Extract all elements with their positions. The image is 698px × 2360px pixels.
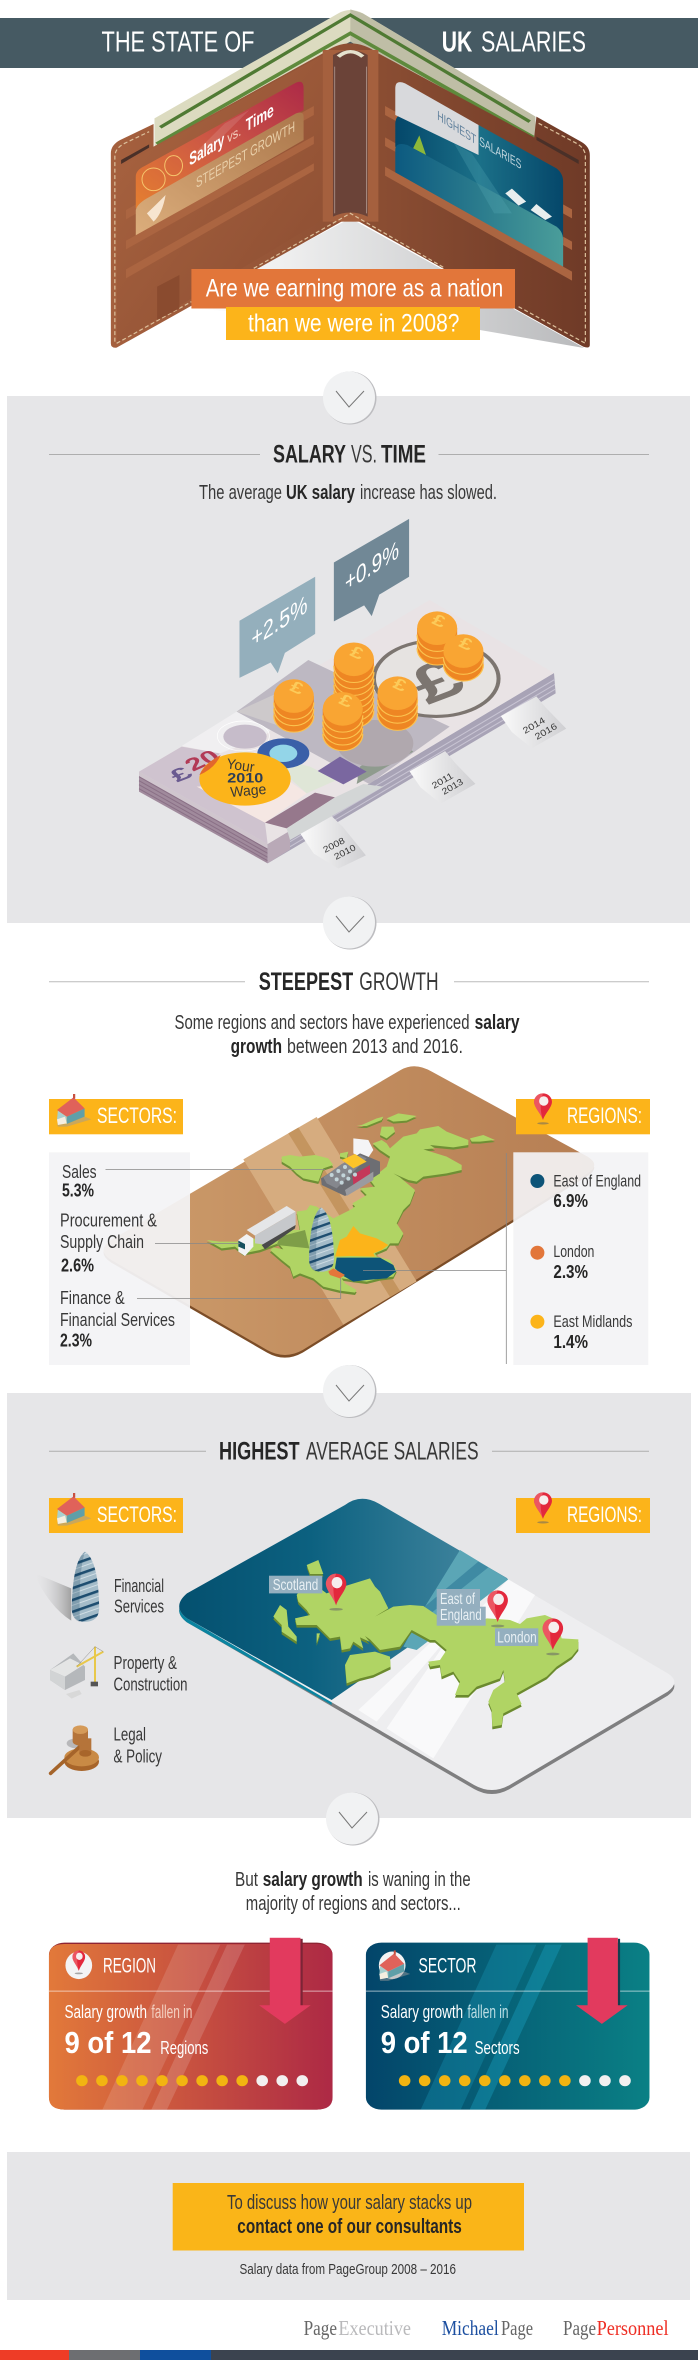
label: east of england: East of bbox=[440, 1591, 475, 1608]
sector: legal and policy: Legal bbox=[114, 1725, 146, 1745]
wallet illustration bbox=[111, 9, 590, 348]
coin pound marks: £ bbox=[429, 610, 448, 632]
icon: gherkin bbox=[309, 1207, 334, 1272]
sector: property and construction bbox=[50, 1647, 187, 1699]
title left: THE STATE OF bbox=[102, 26, 254, 58]
panel: call to action bbox=[7, 2152, 690, 2300]
intro text: salary growth waning bbox=[235, 1869, 471, 1915]
card: sector: SECTOR bbox=[418, 1954, 476, 1978]
sector list text: Sales bbox=[62, 1162, 97, 1182]
region list text: 1.4% bbox=[553, 1332, 588, 1352]
footer colour bar bbox=[0, 2350, 698, 2360]
sector list text: Supply Chain bbox=[60, 1232, 144, 1252]
brown board with UK map bbox=[49, 1066, 648, 1365]
speech bubble: +2.5%: +2.5% bbox=[252, 589, 308, 653]
region icon bbox=[65, 1951, 92, 1979]
intro text: growth bbox=[231, 1036, 282, 1058]
note value bbox=[163, 746, 226, 785]
sector list text: 2.6% bbox=[61, 1256, 94, 1276]
tab: 2011-2013: 2013 bbox=[440, 777, 465, 797]
sector list text: Financial Services bbox=[60, 1310, 175, 1330]
pin: scotland bbox=[326, 1574, 346, 1611]
logo: michael page: Michael bbox=[442, 2316, 499, 2340]
sector list text bbox=[60, 1162, 175, 1351]
cta box: To discuss how your salary stacks up bbox=[227, 2192, 472, 2214]
logo: page personnel: Personnel bbox=[597, 2316, 669, 2340]
region list text: East Midlands bbox=[553, 1312, 632, 1331]
card: region: fallen in bbox=[151, 2002, 192, 2022]
pin: london bbox=[543, 1618, 563, 1655]
coin pound marks: £ bbox=[456, 633, 475, 655]
section heading: STEEPEST bbox=[259, 968, 353, 996]
sticker: your 2010 wage bbox=[199, 752, 291, 806]
chevron button 4 bbox=[326, 1792, 380, 1846]
intro text: salary growth waning: salary growth bbox=[263, 1869, 363, 1891]
logo: michael page: Page bbox=[501, 2316, 533, 2340]
question banner: Are we earning more as a nation bbox=[206, 274, 503, 302]
speech bubble: +2.5% bbox=[239, 577, 315, 678]
intro text bbox=[199, 482, 497, 504]
coin pound marks: £ bbox=[336, 690, 355, 712]
sector: legal and policy: & Policy bbox=[114, 1747, 162, 1767]
banknote stack with coins bbox=[139, 519, 566, 869]
label: scotland: Scotland bbox=[273, 1577, 318, 1594]
logo: page personnel: Page bbox=[563, 2316, 596, 2340]
icon: house bbox=[57, 1094, 91, 1127]
tab: 2008-2010: 2008 bbox=[321, 835, 346, 855]
section heading: HIGHEST bbox=[219, 1437, 300, 1465]
progress dots bbox=[399, 2075, 631, 2086]
card: region bbox=[49, 1938, 333, 2110]
title right bbox=[442, 26, 586, 58]
sector: legal and policy bbox=[51, 1725, 162, 1773]
intro text: UK salary bbox=[286, 482, 356, 504]
icon: house bbox=[57, 1493, 91, 1526]
regions tag bbox=[516, 1492, 650, 1533]
card: sector: Salary growth bbox=[381, 2002, 463, 2022]
intro text: salary growth waning: is waning in the bbox=[368, 1869, 471, 1891]
sticker: your 2010 wage: Your bbox=[225, 756, 256, 776]
sector list text: Procurement & bbox=[60, 1211, 157, 1231]
sector: financial services bbox=[33, 1552, 164, 1622]
arrow down bbox=[576, 1938, 628, 2024]
sectors tag bbox=[49, 1094, 183, 1134]
region list text: East of England bbox=[553, 1172, 641, 1191]
sectors tag: SECTORS: bbox=[97, 1502, 177, 1527]
section: steepest growth bbox=[49, 968, 650, 1365]
title right: UK bbox=[442, 26, 472, 58]
intro text: Some regions and sectors have experienced bbox=[174, 1012, 470, 1034]
section heading: GROWTH bbox=[359, 968, 439, 996]
card: region: Regions bbox=[160, 2038, 208, 2058]
wallet card labels: HIGHEST bbox=[437, 108, 476, 148]
note value: 20 bbox=[179, 746, 226, 775]
panel: sectors list bbox=[49, 1152, 190, 1365]
cta box: contact one of our consultants bbox=[237, 2216, 462, 2238]
pin: east of england bbox=[487, 1590, 508, 1627]
section heading: TIME bbox=[381, 440, 426, 468]
progress dots bbox=[76, 2075, 308, 2086]
card: region: Salary growth bbox=[64, 2002, 147, 2022]
map: east midlands bbox=[335, 1226, 388, 1257]
intro text: salary growth waning: But bbox=[235, 1869, 258, 1891]
question banner: than we were in 2008? bbox=[248, 310, 460, 338]
regions tag: REGIONS: bbox=[567, 1502, 642, 1527]
speech bubble: +0.9%: +0.9% bbox=[345, 534, 399, 597]
sector: financial services: Services bbox=[114, 1597, 164, 1617]
sector: property and construction: Construction bbox=[114, 1675, 188, 1695]
sector list text: 5.3% bbox=[62, 1181, 94, 1201]
header band bbox=[0, 18, 698, 68]
cta box bbox=[173, 2183, 524, 2250]
label: east of england bbox=[437, 1589, 486, 1626]
chevron button 2 bbox=[323, 896, 376, 950]
card: sector bbox=[366, 1938, 649, 2110]
map: east of england bbox=[335, 1258, 396, 1282]
chevron button 1 bbox=[323, 372, 376, 424]
panel: regions list bbox=[513, 1152, 648, 1365]
tab: 2011-2013: 2011 bbox=[430, 771, 455, 791]
card: highest salaries bbox=[395, 82, 563, 243]
chevron button 3 bbox=[323, 1365, 376, 1418]
arrow down bbox=[259, 1938, 311, 2024]
region list text: 6.9% bbox=[553, 1191, 588, 1211]
tab: 2008-2010 bbox=[300, 816, 366, 869]
coin pound marks: £ bbox=[347, 642, 366, 664]
logo: page executive: Executive bbox=[338, 2316, 411, 2340]
intro text: salary bbox=[475, 1012, 520, 1034]
coin pound marks bbox=[287, 610, 475, 712]
leader lines bbox=[106, 1153, 506, 1364]
sectors tag bbox=[49, 1493, 183, 1533]
card: region: 9 of 12 bbox=[64, 2025, 152, 2060]
note value: £ bbox=[163, 763, 199, 785]
wallet card labels: Salary bbox=[189, 129, 224, 171]
tab: 2008-2010: 2010 bbox=[332, 842, 357, 862]
panel: highest average salaries bbox=[7, 1393, 691, 1818]
sectors tag: SECTORS: bbox=[97, 1103, 177, 1128]
icon: pin bbox=[534, 1492, 552, 1523]
card: sector: fallen in bbox=[468, 2002, 508, 2022]
regions tag: REGIONS: bbox=[567, 1103, 642, 1128]
icon: card terminal bbox=[321, 1138, 380, 1196]
intro text: salary growth waning: majority of regions and sectors... bbox=[246, 1893, 461, 1915]
card: sector: 9 of 12 bbox=[381, 2025, 468, 2060]
section heading: AVERAGE SALARIES bbox=[306, 1437, 479, 1465]
sector list text: 2.3% bbox=[60, 1331, 92, 1351]
wallet card labels: SALARIES bbox=[479, 133, 521, 172]
region list text: 2.3% bbox=[553, 1262, 588, 1282]
sector icon bbox=[379, 1950, 410, 1981]
icon: pin bbox=[534, 1093, 552, 1124]
coin pound marks: £ bbox=[390, 674, 409, 696]
card: sector: Sectors bbox=[475, 2038, 520, 2058]
label: london: London bbox=[497, 1629, 537, 1646]
regions tag bbox=[516, 1093, 650, 1134]
tab: 2014-2016: 2014 bbox=[521, 715, 547, 736]
coin stacks bbox=[274, 611, 483, 751]
logo: page executive: Page bbox=[304, 2316, 337, 2340]
wallet card labels: vs. bbox=[227, 123, 241, 147]
region list text bbox=[530, 1172, 641, 1352]
tab: 2014-2016: 2016 bbox=[533, 721, 559, 742]
card: steepest growth bbox=[136, 113, 304, 237]
section heading bbox=[49, 440, 649, 468]
coin pound marks: £ bbox=[287, 677, 306, 699]
icon: truck bbox=[238, 1206, 296, 1256]
card: region: REGION bbox=[103, 1954, 156, 1978]
tab: 2014-2016 bbox=[501, 696, 566, 748]
big pound sign: £ bbox=[397, 647, 476, 715]
logo: page executive bbox=[304, 2316, 411, 2340]
card: salary vs time bbox=[136, 82, 304, 208]
logo: page personnel bbox=[563, 2316, 669, 2340]
intro text: between 2013 and 2016. bbox=[287, 1036, 463, 1058]
sticker: your 2010 wage: Wage bbox=[230, 782, 267, 801]
label: east of england: England bbox=[440, 1607, 482, 1624]
source note: Salary data from PageGroup 2008 – 2016 bbox=[240, 2261, 456, 2278]
region list text: London bbox=[553, 1242, 594, 1261]
wallet card labels: Time bbox=[246, 100, 274, 137]
map board bbox=[179, 1499, 674, 1794]
intro text bbox=[174, 1012, 520, 1058]
section heading bbox=[49, 1437, 649, 1465]
intro text: increase has slowed. bbox=[360, 482, 497, 504]
title right: SALARIES bbox=[481, 26, 586, 58]
map: london bbox=[328, 1268, 345, 1278]
wallet card labels: STEEPEST GROWTH bbox=[196, 118, 295, 192]
wallet card labels bbox=[189, 100, 521, 192]
section heading: VS. bbox=[351, 440, 377, 468]
sticker: your 2010 wage: 2010 bbox=[227, 770, 264, 786]
section heading bbox=[49, 968, 649, 996]
section heading: SALARY bbox=[273, 440, 346, 468]
intro text: The average bbox=[199, 482, 282, 504]
tab: 2011-2013 bbox=[410, 751, 475, 804]
question banner bbox=[191, 269, 515, 340]
speech bubble: +0.9% bbox=[334, 519, 409, 621]
sector: financial services: Financial bbox=[114, 1576, 164, 1596]
logos bbox=[304, 2316, 669, 2340]
sector list text: Finance & bbox=[60, 1288, 125, 1308]
sector: property and construction: Property & bbox=[114, 1653, 177, 1673]
panel: salary vs time bbox=[7, 396, 690, 923]
